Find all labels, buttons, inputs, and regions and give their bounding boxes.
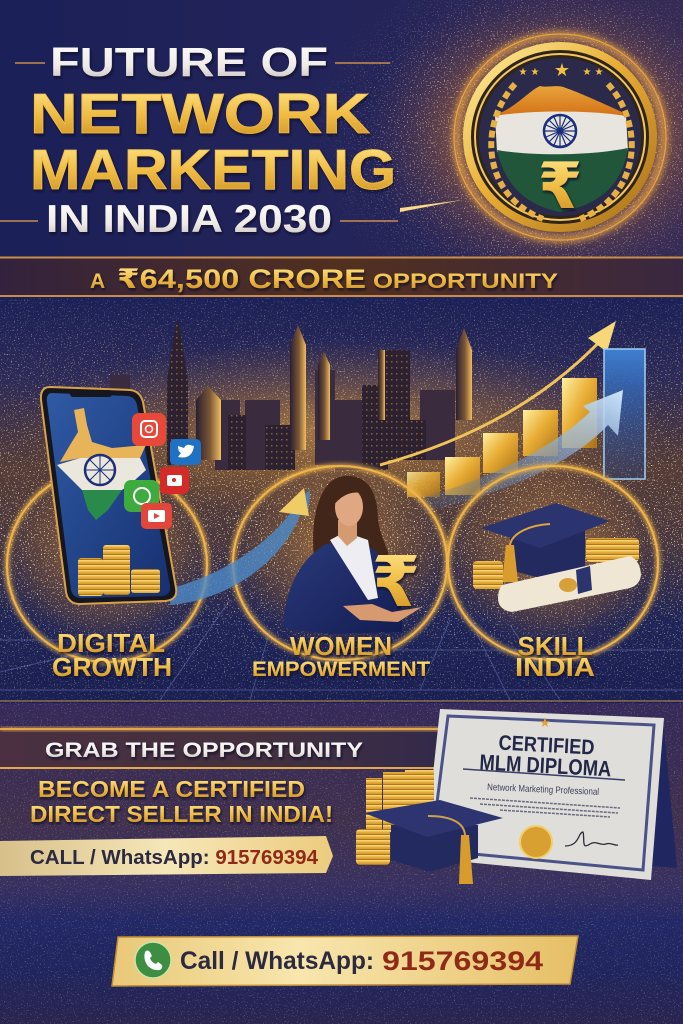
glow fill: women empowerment	[233, 466, 447, 660]
title line: marketing: MARKETING	[30, 138, 396, 202]
label: skill india: SKILL	[518, 631, 593, 661]
label: digital growth	[52, 628, 172, 682]
banner text: ₹64,500 CRORE	[117, 264, 366, 294]
title line: network: NETWORK	[30, 82, 370, 146]
button text: label: Call / WhatsApp:	[180, 947, 374, 975]
certificate title: CERTIFIED	[498, 732, 595, 760]
small stars: ★	[519, 67, 528, 78]
icon: youtube	[160, 467, 189, 494]
seal	[520, 826, 552, 858]
certified direct seller text	[30, 776, 333, 827]
footer call button	[112, 936, 578, 986]
phone body	[41, 387, 176, 604]
small stars: ★	[531, 67, 540, 78]
coins left	[473, 561, 503, 589]
icon: instagram	[132, 413, 166, 446]
subtitle: Network Marketing Professional	[487, 782, 599, 798]
city skyline	[110, 322, 472, 470]
tassel	[510, 524, 550, 580]
ring: digital growth	[7, 468, 207, 662]
small stars: ★	[595, 67, 604, 78]
border	[431, 716, 654, 870]
lower sparkle texture	[0, 703, 683, 1024]
section background: skyline scene	[0, 298, 683, 703]
button text: number: 915769394	[382, 946, 543, 976]
phone with India map	[41, 387, 201, 604]
small stars: ★	[583, 67, 592, 78]
cap body	[391, 825, 478, 872]
body text lines	[470, 798, 620, 817]
towers	[167, 322, 426, 470]
section background: footer	[0, 920, 683, 1024]
line two: DIRECT SELLER IN INDIA!	[30, 801, 333, 827]
pill shape	[0, 836, 333, 876]
lower stack	[356, 829, 390, 865]
phone coins	[78, 545, 160, 596]
paper	[424, 709, 664, 880]
upper stacks	[366, 770, 434, 832]
ring glow	[7, 466, 658, 662]
ring: skill india	[448, 466, 658, 660]
flag: green band	[497, 148, 628, 212]
band rules	[0, 729, 440, 768]
face	[335, 488, 363, 526]
tassel cord	[428, 816, 465, 835]
blazer	[283, 540, 402, 634]
hair fringe	[333, 485, 364, 506]
gold bars	[407, 378, 597, 497]
signature	[565, 832, 618, 846]
banner text: A	[90, 270, 105, 293]
label: women empowerment	[252, 631, 430, 681]
icon: phone	[135, 942, 171, 978]
icon: twitter	[170, 439, 201, 465]
rule	[463, 769, 625, 780]
medallion glow	[456, 35, 664, 239]
header sparkle texture	[300, 0, 683, 258]
tassel end	[502, 545, 518, 582]
back panel	[652, 718, 677, 868]
shirt	[330, 532, 378, 600]
flag: white band	[495, 112, 628, 155]
icon: video	[141, 503, 172, 529]
flag: saffron band	[496, 86, 624, 118]
sparkle texture	[0, 298, 683, 703]
arrow tip	[279, 488, 309, 516]
India map: white	[57, 458, 146, 490]
label: skill india: INDIA	[515, 652, 595, 682]
India map: saffron	[60, 408, 146, 462]
city glow	[10, 340, 670, 520]
button shape	[112, 936, 578, 986]
scene floor glow line	[0, 700, 683, 702]
title line: in india 2030: IN INDIA 2030	[46, 198, 332, 241]
laurel wreath	[491, 84, 632, 219]
section background: lower band	[0, 700, 683, 920]
band fill	[0, 729, 440, 768]
medallion inner field	[479, 58, 641, 216]
ashoka chakra	[544, 115, 576, 147]
banner gold rules	[0, 258, 683, 296]
title block	[0, 39, 398, 241]
perspective floor grid	[0, 600, 683, 700]
growth line arrow	[380, 336, 605, 465]
hair	[313, 476, 391, 575]
label: women empowerment: WOMEN	[290, 631, 392, 661]
banner text: OPPORTUNITY	[373, 270, 558, 293]
grab the opportunity band	[0, 727, 440, 768]
diploma cap	[364, 800, 503, 884]
blue rising arrow	[422, 390, 623, 512]
blue bar	[604, 349, 645, 479]
stars: ★	[554, 60, 570, 80]
cap body	[510, 530, 585, 578]
label: women empowerment: EMPOWERMENT	[252, 658, 430, 681]
graduation cap and scroll	[473, 503, 641, 612]
phone screen	[47, 393, 170, 598]
scroll band	[576, 566, 592, 594]
growth arrowhead	[588, 321, 616, 352]
India map: green	[82, 490, 122, 520]
rupee statue: ₹	[372, 543, 420, 621]
label: skill india	[515, 631, 595, 682]
neck	[338, 520, 357, 546]
icon: whatsapp	[124, 480, 159, 512]
title rules	[0, 63, 398, 221]
tassel	[459, 835, 473, 884]
glows behind the three features	[7, 340, 670, 662]
glow fill: skill india	[448, 466, 658, 660]
label: digital growth: GROWTH	[52, 652, 172, 682]
rings: three feature circles	[7, 466, 658, 662]
bright towers	[196, 325, 472, 460]
star: ★	[539, 715, 551, 730]
arrow: phone to women	[170, 488, 310, 605]
medallion rings	[454, 34, 666, 240]
pill text: CALL / WhatsApp: 915769394	[30, 847, 319, 869]
band glow	[0, 727, 440, 731]
line one: BECOME A CERTIFIED	[38, 776, 305, 802]
banner strip	[0, 258, 683, 296]
header glow behind medallion	[365, 0, 683, 285]
phone notch	[70, 390, 112, 397]
cap board	[364, 800, 503, 837]
scroll	[498, 556, 641, 612]
woman holding rupee	[283, 476, 422, 634]
certificate title	[479, 731, 613, 781]
certificate title: MLM DIPLOMA	[479, 750, 612, 781]
cap board	[481, 503, 610, 548]
band text: GRAB THE OPPORTUNITY	[45, 739, 363, 762]
coin stacks	[356, 770, 434, 865]
opportunity banner	[0, 258, 683, 296]
scroll seal	[559, 578, 577, 592]
rupee symbol: ₹	[538, 150, 582, 222]
medallion: India flag and rupee	[400, 34, 666, 240]
hands	[343, 604, 422, 622]
certificate	[424, 709, 677, 880]
back towers	[110, 370, 455, 470]
title line: future of: FUTURE OF	[50, 39, 328, 85]
map chakra	[85, 455, 115, 485]
feature labels	[52, 628, 595, 682]
glow fill: digital growth	[7, 468, 207, 662]
coins right	[586, 538, 639, 562]
label: digital growth: DIGITAL	[57, 628, 165, 658]
ring: women empowerment	[233, 466, 447, 660]
arrow body	[170, 490, 310, 605]
call pill	[0, 836, 333, 876]
growth chart	[380, 321, 645, 512]
flare	[400, 200, 462, 212]
